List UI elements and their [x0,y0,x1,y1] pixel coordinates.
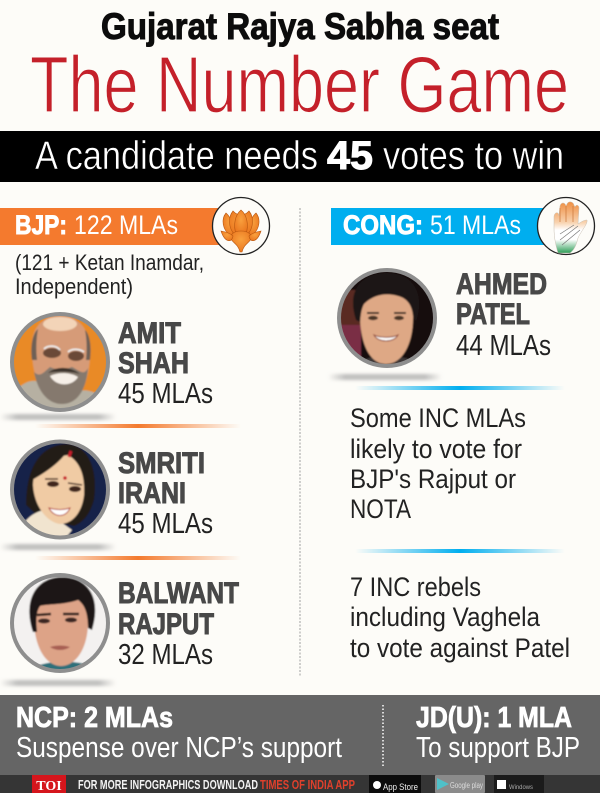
label: Ahmed Patel: AHMED [456,268,547,301]
label: Balwant Rajput: BALWANT [118,577,239,610]
label: Amit Shah [118,317,213,410]
divider line [355,386,565,390]
label: Ahmed Patel [456,268,551,362]
footer app name: TIMES OF INDIA APP [260,777,355,792]
portrait: Amit Shah [0,312,116,420]
portrait: Smriti Irani [0,439,116,550]
label: Ahmed Patel: 44 MLAs [456,330,551,362]
badge: Windows Phone [494,775,544,793]
text: INC rebels [350,572,570,663]
banner: votes needed to win [0,131,600,182]
text: INC MLAs cross-voting: likely to vote for [350,434,522,464]
badge: App Store [369,775,421,793]
footer bar [0,775,600,793]
banner: votes needed to win: votes to win [383,134,564,178]
panel: BJP header [0,198,270,254]
badge: Google Play: Google play [450,781,483,790]
logo: TOI [32,775,66,793]
text: JD(U) [416,702,580,764]
text: INC MLAs cross-voting [350,403,526,524]
panel: Congress header [331,198,594,254]
portrait: Ahmed Patel [328,268,442,380]
label: Balwant Rajput: 32 MLAs [118,639,213,671]
text: INC rebels: to vote against Patel [350,633,570,663]
text: INC MLAs cross-voting: Some INC MLAs [350,403,526,433]
label: Smriti Irani: SMRITI [118,447,205,480]
banner: votes needed to win: A candidate needs [35,134,318,178]
banner: votes needed to win: 45 [327,134,373,178]
text: JD(U): JD(U): 1 MLA [416,702,572,734]
label: Amit Shah: 45 MLAs [118,378,213,410]
divider line [35,424,241,428]
icon: BJP lotus [212,198,270,254]
divider line [355,549,565,553]
portrait: Balwant Rajput [0,573,116,686]
text: NCP: Suspense over NCP’s support [16,732,342,764]
label: Smriti Irani: 45 MLAs [118,508,213,540]
panel: Congress header: 51 MLAs [430,210,521,240]
panel: BJP header: 122 MLAs [74,210,178,240]
badge: Windows Phone: Windows [509,785,533,791]
label: Smriti Irani [118,447,213,540]
text: BJP note: (121 + Ketan Inamdar, [15,250,204,275]
text: BJP note [15,250,204,299]
badge: App Store: App Store [383,782,418,792]
label: Smriti Irani: IRANI [118,477,186,510]
column divider [299,208,301,676]
text: NCP: NCP: 2 MLAs [16,702,173,734]
text: BJP note: Independent) [15,274,133,299]
panel: BJP header: BJP: [15,210,67,240]
text: INC MLAs cross-voting: BJP's Rajput or [350,464,516,494]
footer promo text: FOR MORE INFOGRAPHICS DOWNLOAD [78,777,258,792]
text: NCP [16,702,342,764]
label: Balwant Rajput [118,577,239,671]
panel: other parties [0,695,600,775]
label: Ahmed Patel: PATEL [456,298,530,331]
divider line [35,556,241,560]
label: Amit Shah: SHAH [118,347,189,380]
label: Amit Shah: AMIT [118,317,181,350]
label: Balwant Rajput: RAJPUT [118,608,214,641]
text: INC MLAs cross-voting: NOTA [350,494,411,524]
title: Gujarat Rajya Sabha seat: Gujarat Rajya Sabha seat [101,6,499,47]
badge: Google Play [435,775,485,793]
text: INC rebels: 7 INC rebels [350,572,481,602]
text: INC rebels: including Vaghela [350,602,541,632]
panel: Congress header: CONG: [343,210,423,240]
icon: Congress hand [538,198,594,254]
